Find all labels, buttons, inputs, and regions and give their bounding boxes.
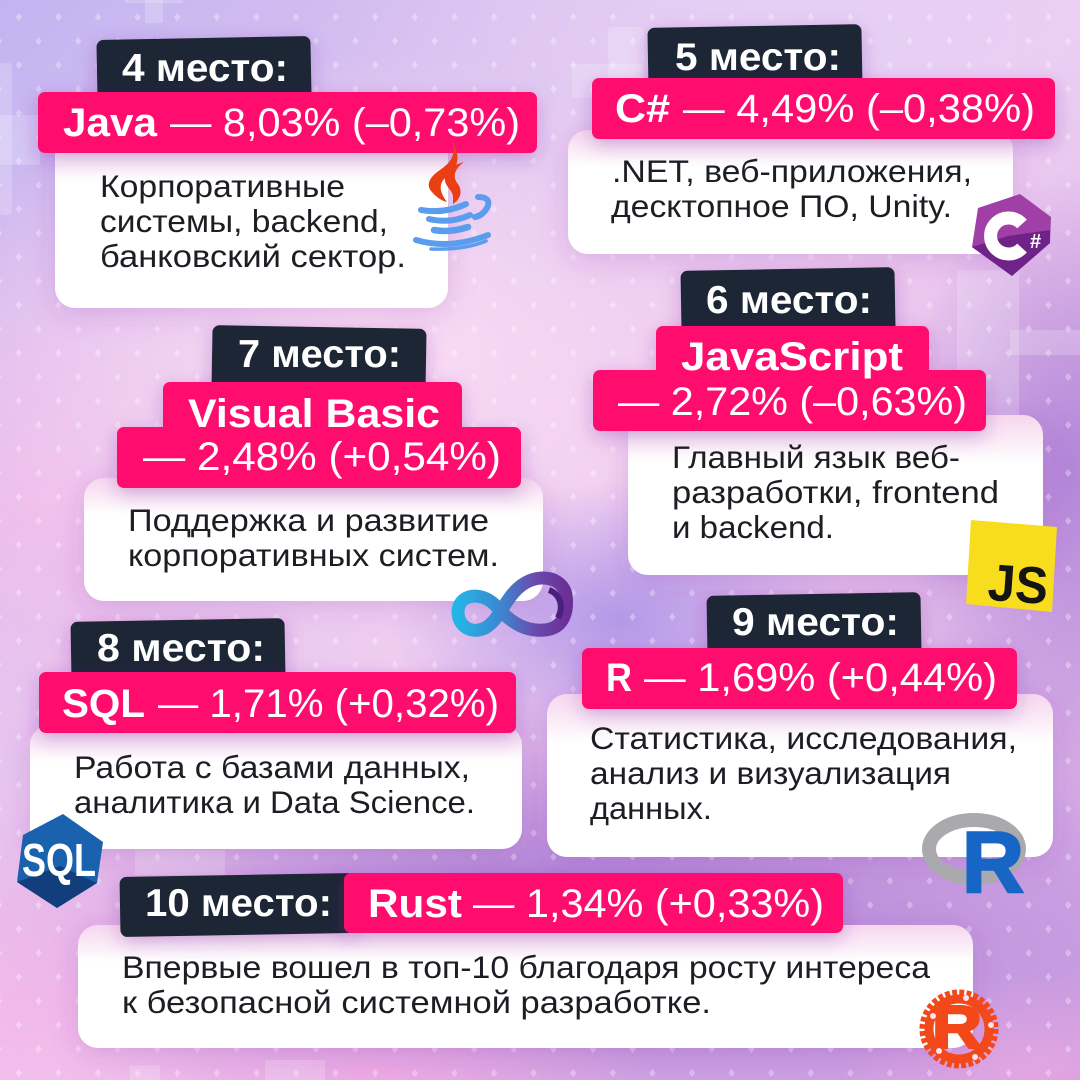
- label: C# share: [592, 78, 1055, 139]
- description: Java: системы, backend,: [100, 203, 388, 239]
- panel: 6 место JavaScript: [593, 267, 1057, 616]
- badge: 10 место: [119, 873, 356, 937]
- description: R: данных.: [590, 790, 712, 826]
- badge: 5 место: 5 место:: [675, 36, 841, 79]
- icon: R: [929, 815, 1024, 911]
- description: Rust: к безопасной системной разработке.: [122, 984, 711, 1020]
- badge: 4 место: [96, 36, 312, 110]
- label: C# share: — 4,49% (–0,38%): [683, 87, 1035, 131]
- badge: 9 место: 9 место:: [732, 601, 899, 644]
- icon: SQL: SQL: [22, 834, 96, 886]
- description: Rust: Впервые вошел в топ-10 благодаря росту интереса: [122, 949, 931, 985]
- label: R share: — 1,69% (+0,44%): [644, 656, 997, 700]
- badge: 6 место: 6 место:: [706, 279, 872, 322]
- badge: 9 место: [706, 592, 922, 664]
- badge: 7 место: [211, 325, 427, 397]
- icon: Java: [416, 141, 488, 249]
- panel: 8 место SQL: [17, 618, 522, 908]
- description: C#: десктопное ПО, Unity.: [611, 188, 952, 224]
- description: Java: Корпоративные: [100, 168, 345, 204]
- description: C#: .NET, веб-приложения,: [612, 153, 972, 189]
- description: R: анализ и визуализация: [590, 755, 951, 791]
- badge: 7 место: 7 место:: [238, 333, 401, 376]
- label: Visual Basic share: Visual Basic: [188, 392, 440, 436]
- description: Visual Basic: [128, 502, 499, 573]
- description: Rust: [122, 949, 931, 1020]
- description: R: Статистика, исследования,: [590, 720, 1017, 756]
- icon: Rust: R: [932, 994, 982, 1061]
- icon: JS: [966, 520, 1057, 616]
- description: JavaScript: [672, 439, 999, 545]
- icon: JS: JS: [986, 554, 1050, 616]
- label: R share: [582, 648, 1017, 709]
- card: Visual Basic: [84, 478, 543, 601]
- description: SQL: аналитика и Data Science.: [74, 784, 475, 820]
- description: JavaScript: и backend.: [672, 509, 834, 545]
- label: JavaScript share: — 2,72% (–0,63%): [618, 380, 967, 424]
- description: Visual Basic: Поддержка и развитие: [128, 502, 489, 538]
- label: Java share: Java: [63, 101, 158, 145]
- label: SQL share: SQL: [62, 682, 145, 726]
- panel: 4 место Java: [38, 36, 537, 308]
- description: JavaScript: Главный язык веб-: [672, 439, 960, 475]
- description: SQL: [74, 749, 475, 820]
- label: Rust share: — 1,34% (+0,33%): [473, 882, 824, 926]
- badge: 4 место: 4 место:: [122, 47, 288, 90]
- label: Rust share: Rust: [368, 882, 462, 926]
- label: SQL share: [39, 672, 516, 733]
- icon: Rust: [922, 992, 996, 1066]
- badge: 6 место: [680, 267, 896, 341]
- panel: 9 место R: [547, 592, 1053, 911]
- icon: C#: #: [1030, 231, 1041, 253]
- card: SQL: [30, 725, 522, 849]
- card: JavaScript: [628, 415, 1043, 575]
- card: R: [547, 694, 1053, 857]
- description: JavaScript: разработки, frontend: [672, 474, 999, 510]
- panel: 5 место C#: [568, 24, 1055, 276]
- label: C# share: C#: [615, 87, 670, 131]
- label: Java share: — 8,03% (–0,73%): [170, 101, 520, 145]
- icon: R: R: [962, 815, 1024, 911]
- label: Java share: [38, 92, 537, 153]
- label: R share: R: [606, 656, 632, 700]
- panel: 10 место Rust: [78, 873, 996, 1066]
- icon: Visual Basic: [458, 578, 567, 630]
- card: C#: [568, 130, 1013, 254]
- label: JavaScript share: JavaScript: [681, 335, 903, 379]
- description: Java: [100, 168, 406, 274]
- description: R: [590, 720, 1017, 826]
- badge: 8 место: [70, 618, 286, 692]
- label: Visual Basic share: [117, 382, 521, 488]
- label: Visual Basic share: — 2,48% (+0,54%): [143, 435, 501, 479]
- card: Java: [55, 130, 448, 308]
- label: JavaScript share: [593, 326, 986, 431]
- label: SQL share: — 1,71% (+0,32%): [158, 682, 499, 726]
- icon: SQL: [17, 814, 103, 908]
- description: Java: банковский сектор.: [100, 238, 406, 274]
- badge: 10 место: 10 место:: [145, 882, 332, 925]
- description: SQL: Работа с базами данных,: [74, 749, 470, 785]
- description: C#: [611, 153, 972, 224]
- icon: C#: [972, 194, 1051, 276]
- description: Visual Basic: корпоративных систем.: [128, 537, 499, 573]
- panel: 7 место Visual Basic: [84, 325, 567, 630]
- badge: 5 место: [647, 24, 863, 98]
- card: Rust: [78, 925, 973, 1048]
- badge: 8 место: 8 место:: [97, 627, 265, 670]
- label: Rust share: [344, 873, 843, 933]
